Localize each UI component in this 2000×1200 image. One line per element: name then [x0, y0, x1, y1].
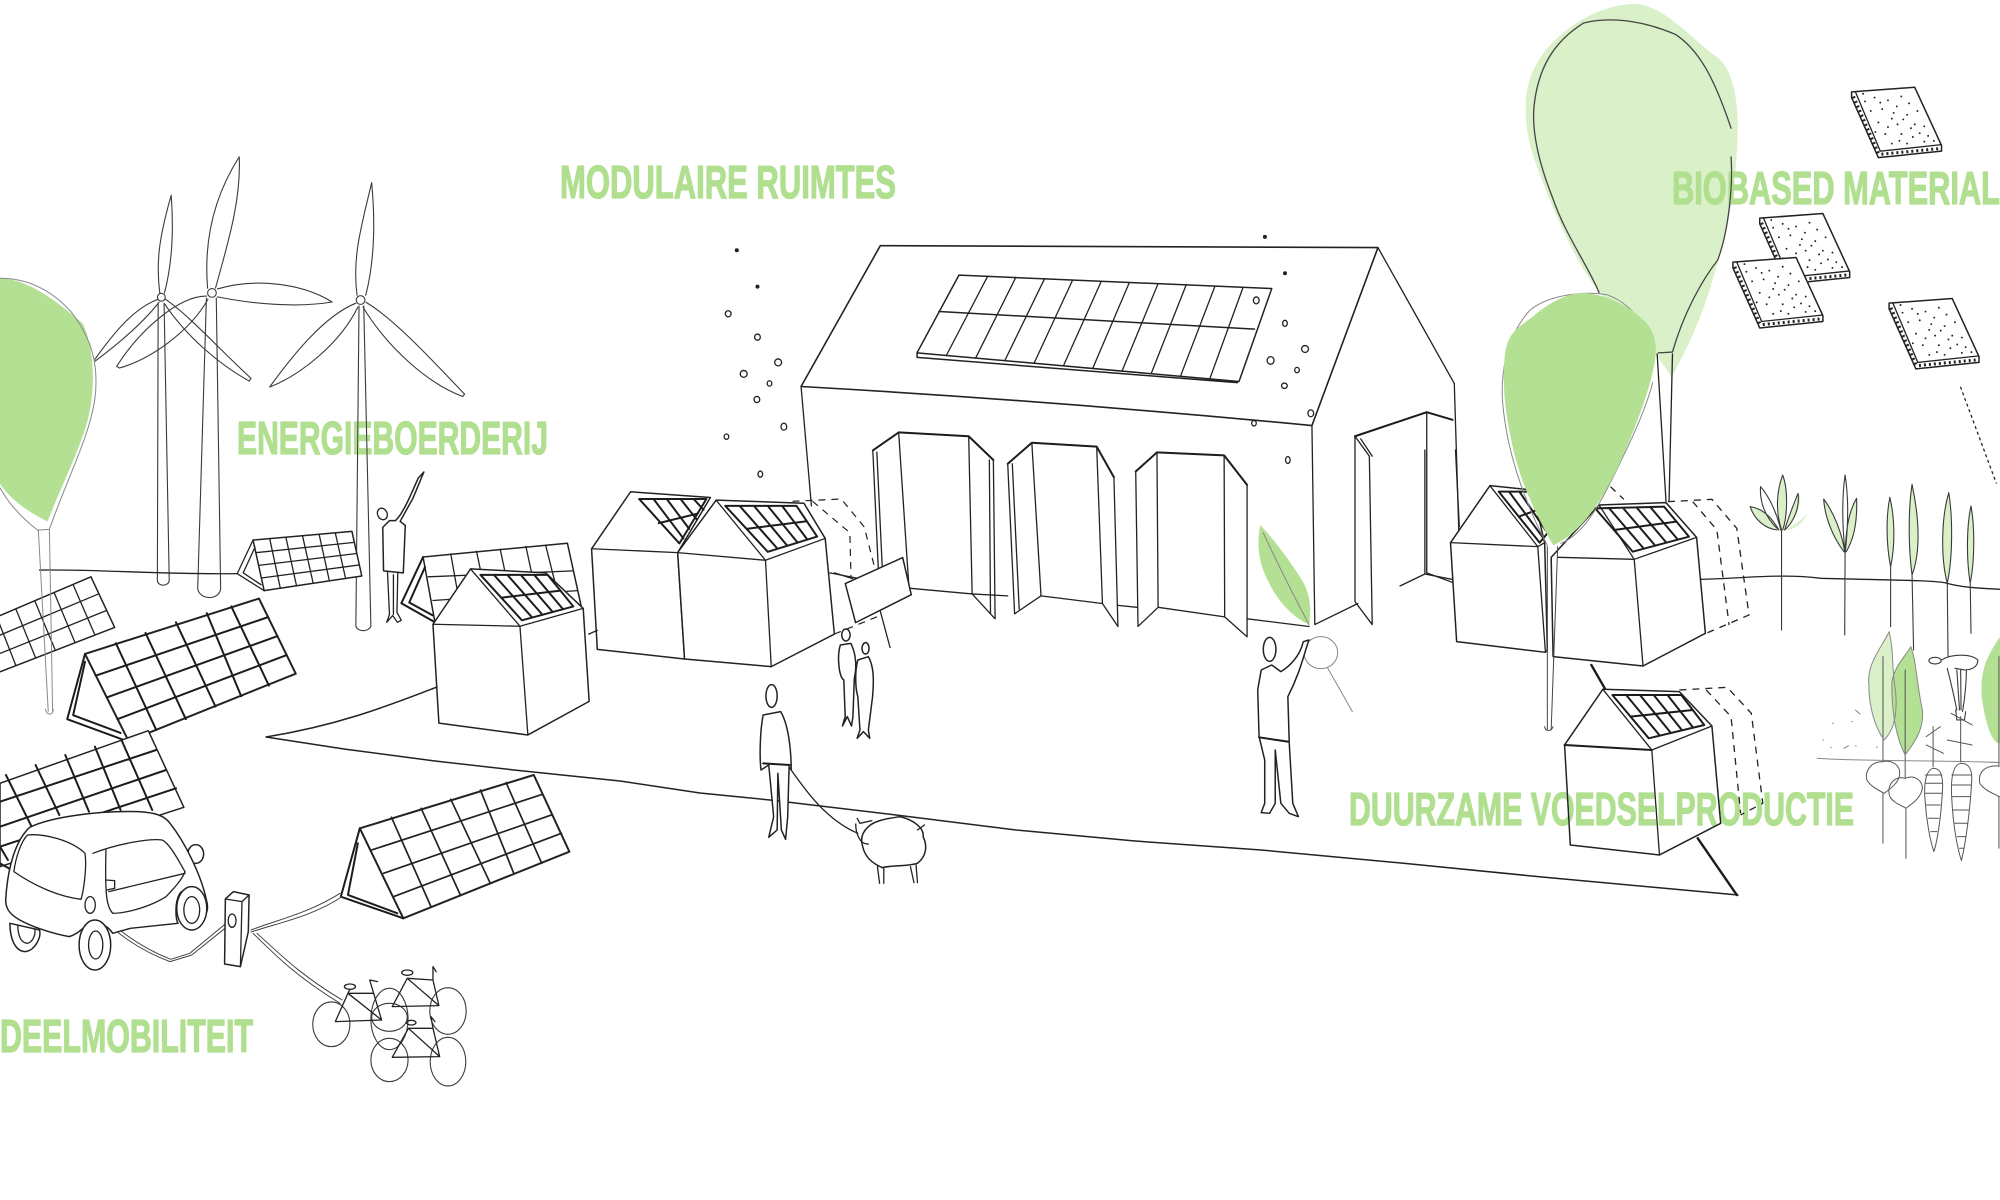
person walking sheep: [760, 685, 858, 839]
green leaf: [1258, 525, 1310, 625]
sheep: [856, 817, 926, 883]
label: energieboerderij: ENERGIEBOERDERIJ: [237, 412, 548, 464]
ground line: [40, 570, 237, 574]
wind turbines and far-left field: [0, 157, 589, 741]
front tree crown: [1502, 293, 1656, 545]
small modular house, left: [433, 569, 589, 735]
car, charging post, panel, bicycles: [0, 731, 569, 1086]
wind turbine 3: [270, 183, 465, 631]
biobased board 3: [1733, 258, 1823, 328]
right houses, plants and vegetables: [1400, 450, 2000, 895]
back tree, pale: [1526, 4, 1738, 501]
right wall base of hall: [1400, 450, 1459, 586]
label: modulaire ruimtes: MODULAIRE RUIMTES: [560, 156, 896, 208]
two people by the sign: [839, 629, 873, 738]
ground line right: [1700, 576, 2000, 589]
vegetables: ground line: [1817, 710, 2000, 763]
modular house, bottom right: [1565, 665, 1763, 895]
modular house, right pair: [1451, 486, 1749, 666]
falling seeds: [724, 237, 1314, 477]
folding door 2: [1008, 443, 1118, 626]
charging post: [225, 892, 249, 967]
people and sheep: [760, 629, 1352, 883]
cables: [91, 893, 342, 1003]
solar array: lower right: [341, 775, 569, 918]
solar array: large: [67, 599, 296, 741]
person pointing up: [376, 472, 424, 622]
right-hand trees and houses: [1526, 4, 1996, 501]
gardener: [1929, 655, 1978, 720]
shared bicycles: [313, 967, 466, 1086]
electric car: [6, 812, 207, 970]
biobased board 4: [1889, 299, 1979, 369]
folding door 1: [873, 432, 995, 619]
protest sign: [845, 558, 911, 648]
biobased board 1: [1852, 87, 1942, 158]
wind turbine 1: [95, 195, 251, 585]
front tree: [1545, 547, 1558, 730]
modular house, pair: [589, 492, 881, 667]
solar array: lower left: [0, 731, 184, 870]
solar array: back: [237, 531, 362, 591]
label: deelmobiliteit: DEELMOBILITEIT: [0, 1010, 253, 1062]
vegetables: leafy tops: [1869, 632, 2000, 778]
folding door 3: [1136, 452, 1247, 637]
hall outline and roof: [801, 246, 1460, 626]
ghost balloon: [1304, 637, 1352, 712]
dotted line: [1961, 387, 1996, 483]
single-leaf shoots: [1887, 484, 1974, 657]
person raising leaf: [1258, 637, 1309, 817]
folding door 4: [1355, 412, 1453, 625]
plant 1: [1750, 475, 1808, 630]
roof solar panel: [917, 275, 1272, 383]
left tree: [0, 278, 96, 714]
ground plaza outline: [266, 687, 1738, 895]
biobased board 2: [1760, 214, 1850, 284]
wind turbine 2: [117, 157, 332, 598]
solar array: left, cropped: [0, 577, 115, 674]
solar array: behind small house: [401, 543, 581, 622]
main hall with folding doors: [589, 237, 1460, 667]
plant 2: [1824, 475, 1857, 635]
vegetables: beets and carrots: [1866, 713, 2000, 861]
